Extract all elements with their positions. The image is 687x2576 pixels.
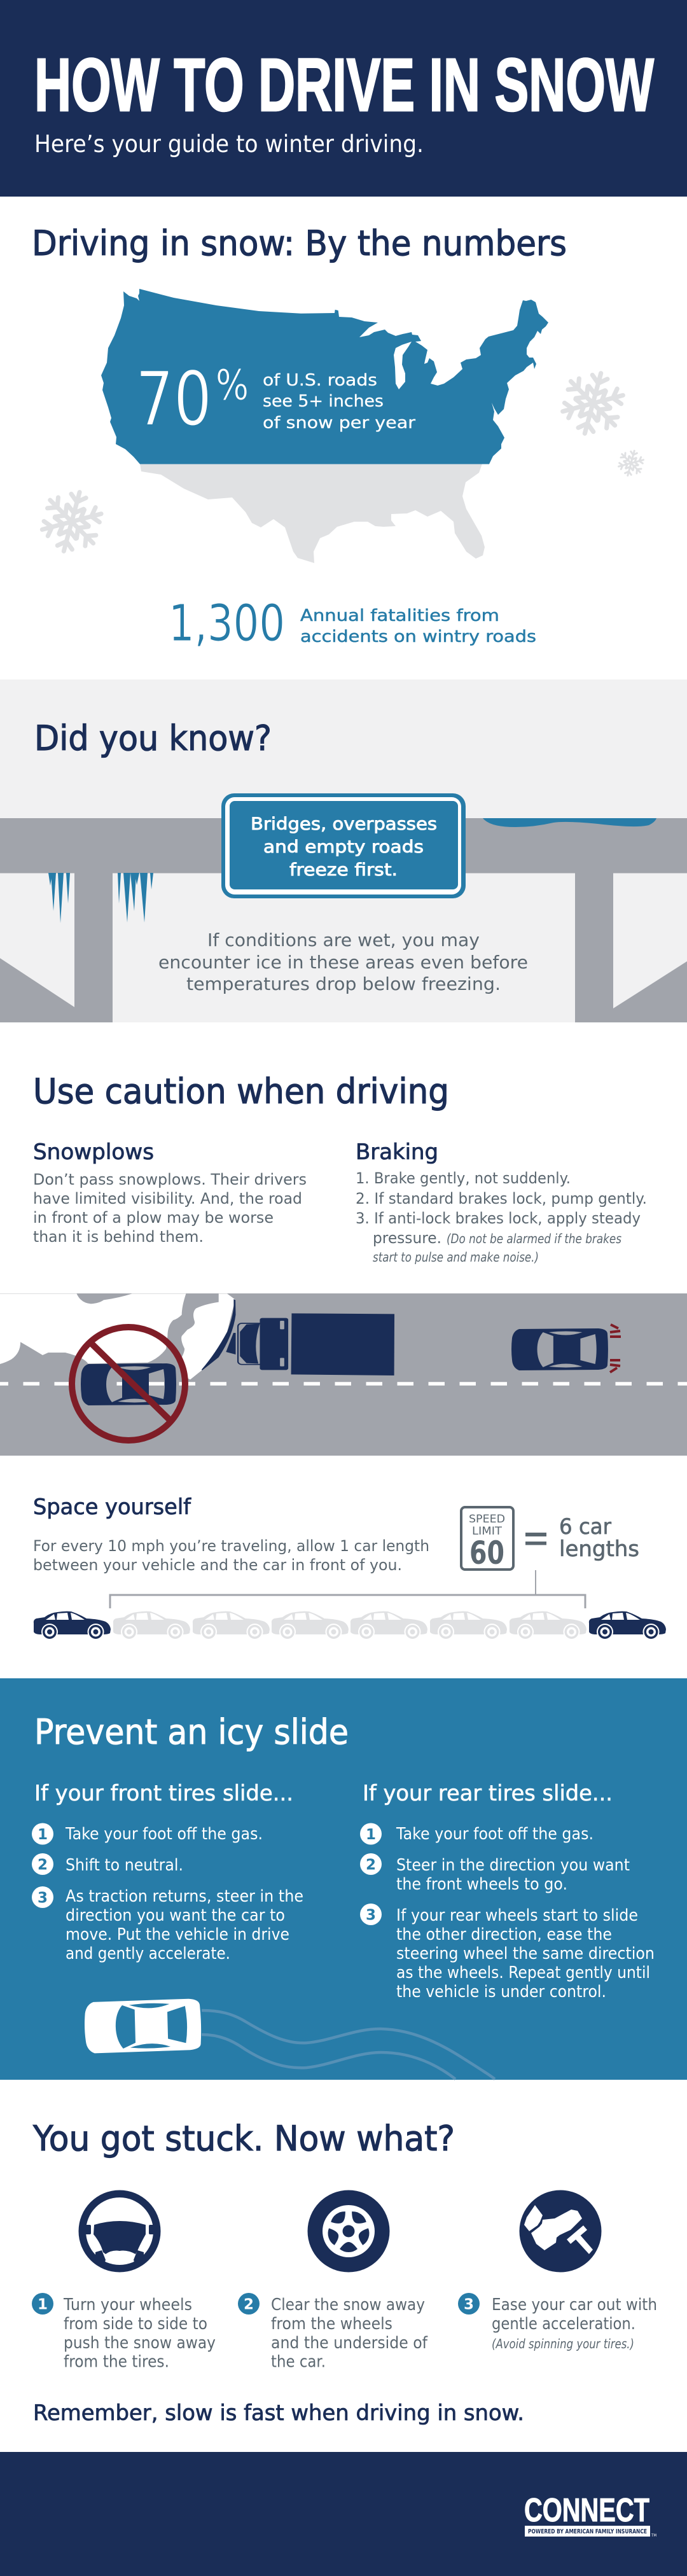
heading: use caution: Use caution when driving <box>33 1071 449 1111</box>
step 3: Ease your car out with <box>492 2295 657 2315</box>
icon: foot on pedal <box>519 2190 602 2273</box>
speed limit sign <box>461 1507 513 1571</box>
road sign callout: and empty roads <box>263 837 424 857</box>
ice puddle on bridge <box>483 818 656 827</box>
map: snowy US, blue <box>101 289 548 464</box>
step 1 <box>32 2293 216 2372</box>
road illustration <box>0 1293 687 1456</box>
heading: you got stuck: You got stuck. Now what? <box>32 2119 455 2159</box>
column: rear tires: the other direction, ease the <box>396 1925 612 1944</box>
column: rear tires: the vehicle is under control. <box>396 1982 606 2002</box>
tire tracks <box>202 2010 495 2079</box>
car: sliding <box>84 1998 202 2054</box>
step 2 <box>238 2293 428 2372</box>
text: wet conditions: temperatures drop below freezing. <box>186 973 501 994</box>
distance bracket <box>110 1570 585 1608</box>
column: front tires: move. Put the vehicle in drive <box>66 1925 289 1944</box>
car row <box>34 1612 666 1640</box>
block: braking <box>356 1139 647 1265</box>
block: snowplows: than it is behind them. <box>33 1228 204 1246</box>
text: wet conditions: encounter ice in these areas even before <box>158 952 528 973</box>
icicles <box>48 873 153 923</box>
column: front tires: 3 <box>38 1890 48 1906</box>
column: front tires: direction you want the car to <box>66 1906 285 1925</box>
text: 6 car lengths <box>559 1514 639 1562</box>
heading: space yourself: Space yourself <box>33 1494 191 1520</box>
snow and truck <box>0 1293 394 1379</box>
panel: use caution <box>0 1071 687 1456</box>
heading: by the numbers: Driving in snow: By the numbers <box>32 223 567 263</box>
step 3: (Avoid spinning your tires.) <box>492 2336 634 2351</box>
text: spacing rule: between your vehicle and the car in front of you. <box>33 1556 402 1574</box>
column: front tires: If your front tires slide... <box>34 1781 293 1806</box>
icon: snowflake left <box>34 484 109 559</box>
column: front tires: 2 <box>38 1856 48 1873</box>
icon: small snowflake right <box>615 447 647 479</box>
block: braking: start to pulse and make noise.) <box>373 1250 539 1265</box>
stat: 70 percent <box>135 355 415 443</box>
road sign callout: Bridges, overpasses <box>251 814 437 834</box>
footer panel <box>0 2452 687 2576</box>
step 1: from side to side to <box>64 2315 207 2334</box>
stat: 70 percent: 70 <box>135 355 212 443</box>
step 2: Clear the snow away <box>271 2295 425 2315</box>
column: rear tires: 1 <box>366 1827 376 1843</box>
step 3: gentle acceleration. <box>492 2315 635 2334</box>
block: braking: 3. If anti-lock brakes lock, apply steady <box>356 1209 641 1227</box>
step 2: the car. <box>271 2353 326 2372</box>
car: passing <box>81 1363 176 1405</box>
column: rear tires: If your rear wheels start to slide <box>396 1906 638 1925</box>
logo: connect: TM <box>651 2533 656 2538</box>
block: braking: Braking <box>356 1139 438 1165</box>
column: front tires: As traction returns, steer in the <box>66 1887 303 1906</box>
speed limit sign: 60 <box>469 1535 504 1571</box>
step 1: Turn your wheels <box>63 2295 192 2315</box>
column: front tires <box>32 1781 303 1963</box>
map: Lake Michigan <box>394 342 412 389</box>
stat: 70 percent: see 5+ inches <box>263 392 384 411</box>
speed limit sign: SPEED <box>469 1513 505 1526</box>
stat: 1,300 fatalities: accidents on wintry roads <box>300 627 536 646</box>
road sign callout <box>221 793 466 898</box>
step 2: 2 <box>244 2297 254 2313</box>
column: front tires: Shift to neutral. <box>66 1856 183 1875</box>
panel: prevent an icy slide <box>0 1678 687 2080</box>
column: rear tires: 3 <box>366 1907 376 1924</box>
road sign callout: freeze first. <box>289 860 398 880</box>
stat: 70 percent: of snow per year <box>263 414 415 433</box>
column: front tires: and gently accelerate. <box>66 1944 230 1963</box>
step 3 <box>458 2293 657 2351</box>
column: rear tires: Steer in the direction you want <box>396 1856 630 1875</box>
speed limit sign: LIMIT <box>472 1525 503 1538</box>
equals sign <box>525 1533 546 1545</box>
stat: 1,300 fatalities <box>169 594 536 653</box>
block: braking: (Do not be alarmed if the brakes <box>447 1231 621 1246</box>
logo: connect <box>524 2492 656 2538</box>
heading: did you know: Did you know? <box>34 718 272 758</box>
block: braking: pressure. <box>373 1229 441 1247</box>
icon: large snowflake right <box>555 365 631 442</box>
heading: prevent an icy slide: Prevent an icy slide <box>34 1712 349 1752</box>
text: 6 car lengths: lengths <box>559 1536 639 1562</box>
closing line: Remember, slow is fast when driving in snow. <box>33 2400 524 2426</box>
map: southern US, gray <box>140 464 485 563</box>
text: wet conditions: If conditions are wet, you may <box>207 929 480 950</box>
block: braking: 1. Brake gently, not suddenly. <box>356 1169 571 1187</box>
block: snowplows: have limited visibility. And, the road <box>33 1190 302 1208</box>
stat: 1,300 fatalities: Annual fatalities from <box>300 606 499 625</box>
column: rear tires: 2 <box>366 1856 376 1873</box>
header panel <box>0 0 687 197</box>
column: rear tires: as the wheels. Repeat gently until <box>396 1963 650 1982</box>
step 1: 1 <box>38 2297 48 2313</box>
column: rear tires: the front wheels to go. <box>396 1875 567 1894</box>
panel: did you know <box>0 679 687 1022</box>
icon: wheel <box>308 2190 389 2273</box>
panel: you got stuck <box>32 2119 657 2426</box>
step 1: from the tires. <box>64 2353 169 2372</box>
brake lights <box>610 1325 621 1372</box>
text: spacing rule: For every 10 mph you’re traveling, allow 1 car length <box>33 1537 429 1555</box>
bridge illustration <box>0 818 687 1022</box>
step 3: 3 <box>464 2297 474 2313</box>
text: spacing rule <box>33 1537 429 1574</box>
column: rear tires <box>360 1781 655 2002</box>
panel: space yourself <box>33 1494 666 1640</box>
text: 6 car lengths: 6 car <box>559 1514 611 1540</box>
column: front tires: 1 <box>38 1827 48 1843</box>
icon: steering wheel <box>79 2190 160 2273</box>
stat: 1,300 fatalities: 1,300 <box>169 594 285 653</box>
block: braking: 2. If standard brakes lock, pump gently. <box>356 1190 647 1208</box>
subtitle: Here’s your guide to winter driving. <box>34 130 424 158</box>
column: front tires: Take your foot off the gas. <box>65 1825 263 1844</box>
column: rear tires: If your rear tires slide... <box>363 1781 613 1806</box>
stat: 70 percent: of U.S. roads <box>263 371 377 390</box>
car: braking <box>511 1328 608 1370</box>
road center dashes <box>0 1382 687 1386</box>
block: snowplows: Snowplows <box>33 1139 154 1165</box>
step 2: and the underside of <box>271 2334 428 2353</box>
panel: by the numbers <box>0 197 687 679</box>
block: snowplows: in front of a plow may be worse <box>33 1209 274 1227</box>
column: rear tires: Take your foot off the gas. <box>396 1825 593 1844</box>
block: snowplows <box>33 1139 307 1246</box>
stat: 70 percent: % <box>216 361 249 410</box>
icon: prohibition sign <box>72 1327 185 1440</box>
logo: connect: POWERED BY AMERICAN FAMILY INSURANCE <box>528 2528 647 2535</box>
block: snowplows: Don’t pass snowplows. Their drivers <box>33 1171 307 1188</box>
logo: connect: CONNECT <box>524 2492 649 2529</box>
step 2: from the wheels <box>271 2315 392 2334</box>
step 1: push the snow away <box>64 2334 216 2353</box>
column: rear tires: steering wheel the same direction <box>396 1944 655 1963</box>
text: wet conditions <box>158 929 528 994</box>
